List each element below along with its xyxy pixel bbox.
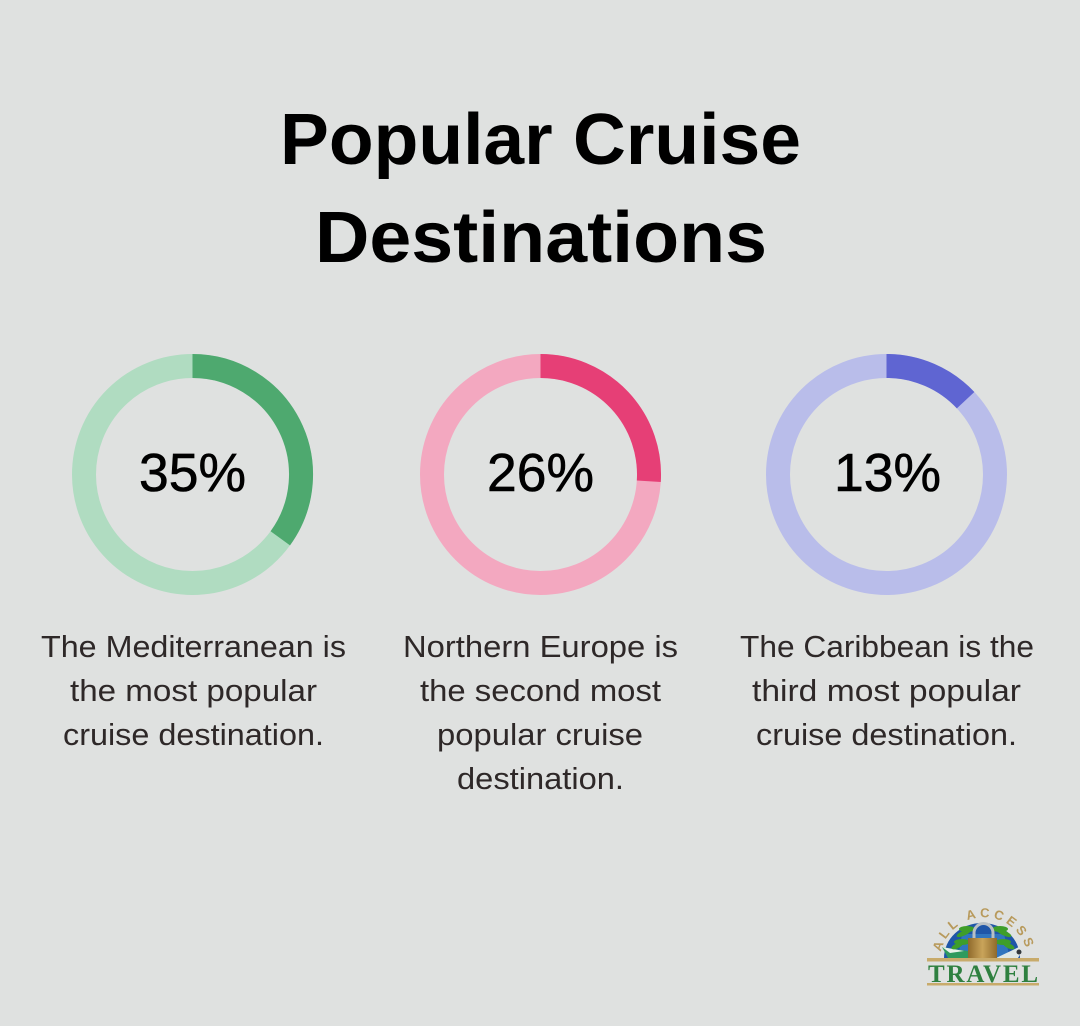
logo: All Access Travel: ALL ACCESS xyxy=(933,908,1034,952)
title: Popular Cruise xyxy=(280,100,801,180)
logo padlock xyxy=(968,924,997,958)
value: 35%: 35% xyxy=(139,443,246,503)
title: Destinations xyxy=(315,198,767,278)
description: Mediterranean xyxy=(41,629,346,752)
panel: Mediterranean xyxy=(41,366,346,752)
logo wordmark: TRAVEL xyxy=(928,961,1038,988)
description: Northern Europe: destination. xyxy=(457,761,624,796)
description: Caribbean: The Caribbean is the xyxy=(740,629,1034,664)
panel: Northern Europe xyxy=(403,366,678,796)
description: Northern Europe: popular cruise xyxy=(437,717,643,752)
description: Northern Europe xyxy=(403,629,678,796)
description: Mediterranean: the most popular xyxy=(70,673,317,708)
description: Mediterranean: cruise destination. xyxy=(63,717,324,752)
logo dome xyxy=(944,923,1020,958)
logo boats xyxy=(942,947,970,958)
panel: Caribbean xyxy=(740,366,1034,752)
donut chart: 35% xyxy=(84,366,301,583)
description: Caribbean: third most popular xyxy=(752,673,1021,708)
description: Northern Europe: Northern Europe is xyxy=(403,629,678,664)
logo bars xyxy=(927,958,1039,962)
description: Caribbean xyxy=(740,629,1034,752)
donut chart: 26% xyxy=(432,366,649,583)
value: 26%: 26% xyxy=(487,443,594,503)
title xyxy=(280,100,801,278)
description: Caribbean: cruise destination. xyxy=(756,717,1017,752)
value: 13%: 13% xyxy=(834,443,941,503)
description: Northern Europe: the second most xyxy=(420,673,661,708)
logo: All Access Travel xyxy=(927,908,1039,988)
logo arc lettering xyxy=(941,917,1027,952)
description: Mediterranean: The Mediterranean is xyxy=(41,629,346,664)
donut chart: 13% xyxy=(778,366,995,583)
logo palms xyxy=(951,926,1015,951)
